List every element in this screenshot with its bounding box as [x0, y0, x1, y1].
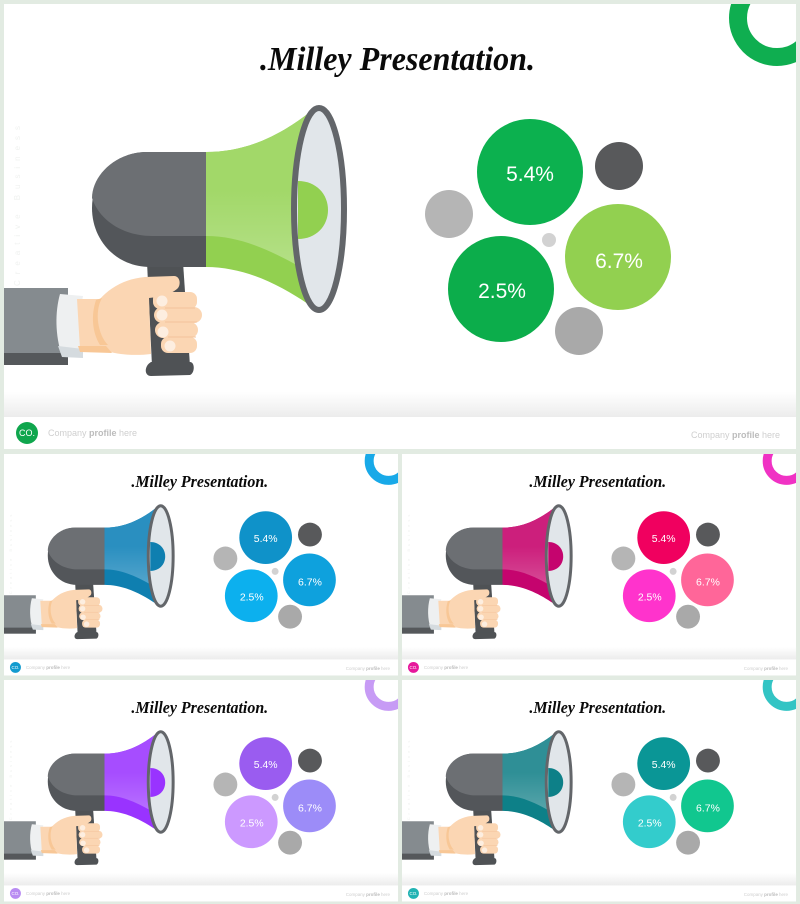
footer — [16, 422, 780, 444]
corner ring — [738, 0, 800, 57]
bubble chart: 2.5% — [240, 818, 264, 829]
bubble chart — [611, 737, 734, 855]
bubble chart: 5.4% — [652, 534, 676, 545]
corner ring — [762, 454, 796, 485]
footer — [10, 662, 391, 673]
footer: Company profile here — [346, 892, 391, 897]
megaphone illustration — [4, 506, 173, 639]
title: .Milley Presentation. — [131, 472, 268, 491]
footer: CO. — [409, 891, 417, 896]
bubble chart: 2.5% — [240, 592, 264, 603]
bubble chart — [213, 511, 336, 629]
footer: CO. — [19, 428, 35, 438]
footer: Company profile here — [26, 891, 71, 896]
megaphone illustration — [4, 732, 173, 865]
bubble chart: 6.7% — [298, 803, 322, 814]
bubble chart: 2.5% — [638, 818, 662, 829]
corner ring — [364, 680, 398, 711]
footer: CO. — [409, 665, 417, 670]
megaphone illustration — [402, 732, 571, 865]
bubble chart — [611, 511, 734, 629]
footer: Company profile here — [744, 666, 789, 671]
slide: blue — [4, 442, 408, 675]
megaphone illustration — [4, 108, 344, 376]
bubble chart: 6.7% — [298, 577, 322, 588]
bubble chart: 5.4% — [506, 163, 554, 186]
bubble chart: 2.5% — [638, 592, 662, 603]
title: .Milley Presentation. — [529, 698, 666, 717]
footer: Company profile here — [346, 666, 391, 671]
footer: Company profile here — [26, 665, 71, 670]
title: .Milley Presentation. — [131, 698, 268, 717]
footer: CO. — [11, 891, 19, 896]
bubble chart: 6.7% — [696, 577, 720, 588]
bubble chart — [213, 737, 336, 855]
bubble chart — [425, 119, 671, 355]
title: .Milley Presentation. — [260, 41, 535, 78]
footer — [408, 888, 789, 899]
footer: Company profile here — [424, 665, 469, 670]
corner ring — [364, 454, 398, 485]
slide: green — [4, 0, 800, 449]
footer: Company profile here — [744, 892, 789, 897]
footer — [10, 888, 391, 899]
megaphone illustration — [402, 506, 571, 639]
footer: Company profile here — [691, 430, 780, 440]
footer: Company profile here — [424, 891, 469, 896]
slide: purple — [4, 668, 408, 901]
bubble chart: 5.4% — [254, 534, 278, 545]
footer: CO. — [11, 665, 19, 670]
bubble chart: 2.5% — [478, 280, 526, 303]
footer: Company profile here — [48, 428, 137, 438]
bubble chart: 5.4% — [652, 760, 676, 771]
title: .Milley Presentation. — [529, 472, 666, 491]
footer — [408, 662, 789, 673]
bubble chart: 6.7% — [696, 803, 720, 814]
slide: teal — [402, 668, 800, 901]
slide: pink — [402, 442, 800, 675]
bubble chart: 6.7% — [595, 250, 643, 273]
bubble chart: 5.4% — [254, 760, 278, 771]
corner ring — [762, 680, 796, 711]
